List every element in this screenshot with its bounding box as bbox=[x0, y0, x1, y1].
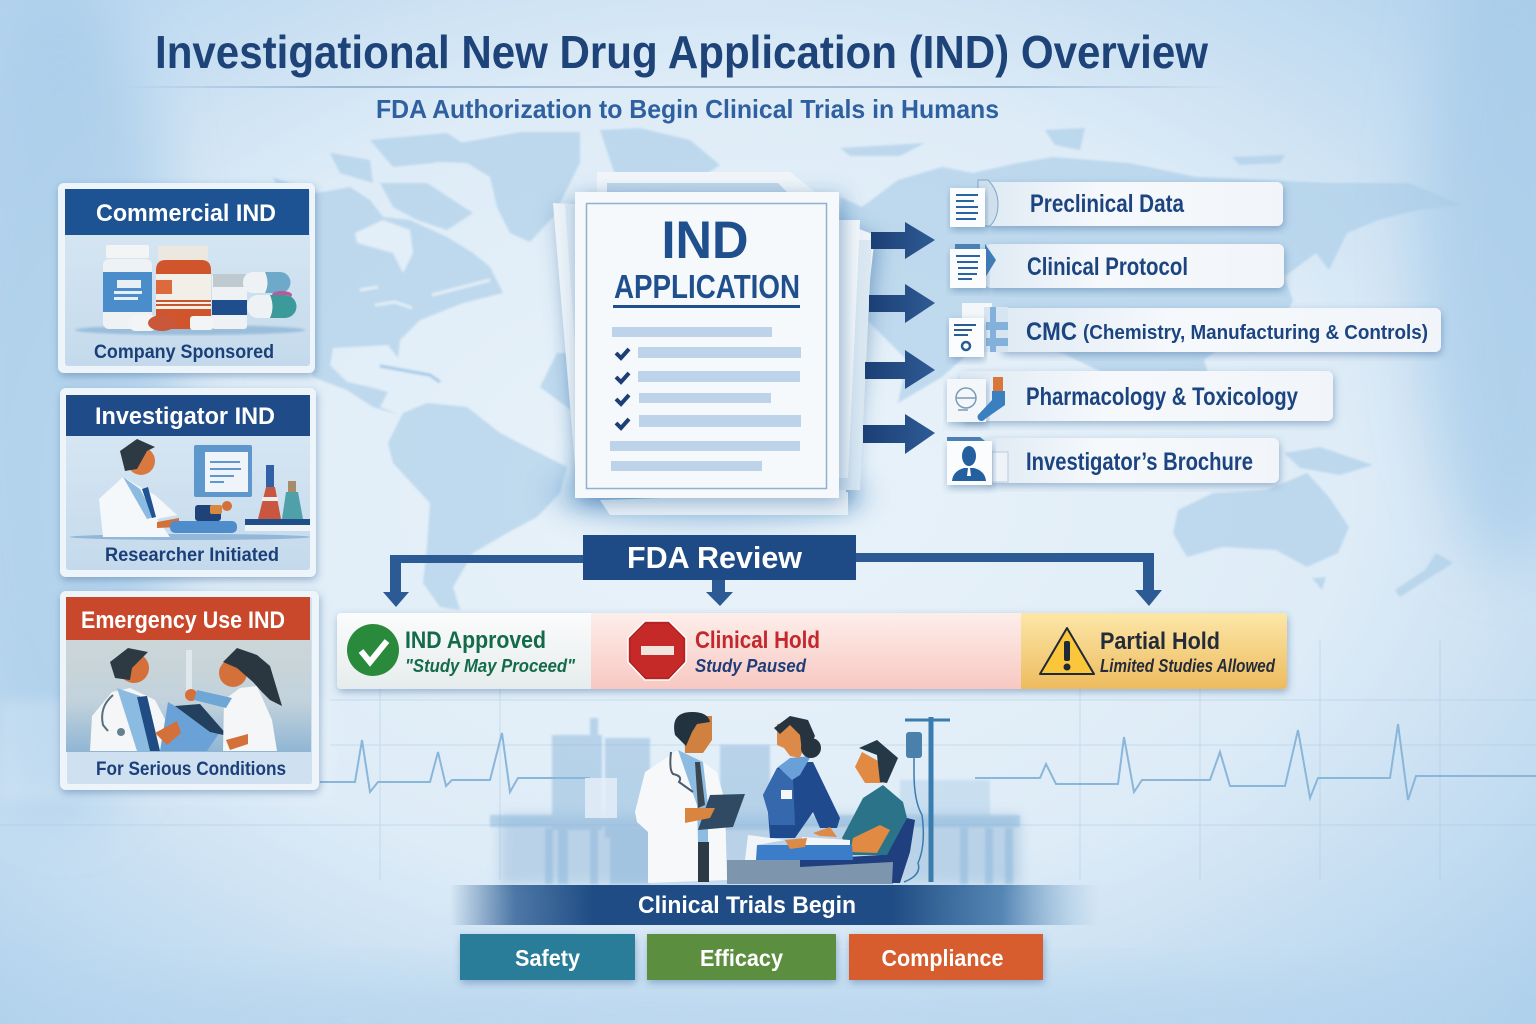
tag: Efficacy: Efficacy bbox=[700, 945, 783, 971]
component: CMC: (Chemistry, Manufacturing & Controls) bbox=[1083, 322, 1428, 344]
icon: stop sign bbox=[628, 621, 686, 680]
icon: chemistry documents bbox=[949, 303, 1008, 357]
title: Investigational New Drug Application (IND) Overview bbox=[155, 26, 1208, 78]
tag: Compliance bbox=[849, 934, 1043, 980]
icon: green check bbox=[347, 624, 399, 676]
banner: Clinical Trials Begin: Clinical Trials Begin bbox=[638, 892, 856, 919]
heading: FDA Review bbox=[583, 535, 856, 580]
illustration: two clinicians consulting bbox=[66, 640, 311, 752]
tag: Efficacy bbox=[647, 934, 836, 980]
heading: FDA Review: FDA Review bbox=[627, 540, 803, 575]
tag: Safety bbox=[460, 934, 635, 980]
heading: Investigator IND: Investigator IND bbox=[95, 403, 275, 430]
caption: For Serious Conditions: For Serious Conditions bbox=[96, 759, 286, 780]
heading: Commercial IND: Commercial IND bbox=[96, 200, 276, 227]
checkmarks bbox=[616, 349, 629, 428]
outcome: IND Approved: "Study May Proceed" bbox=[405, 656, 575, 676]
component: Preclinical Data: Preclinical Data bbox=[1030, 190, 1185, 218]
outcome: Partial Hold bbox=[1021, 613, 1287, 689]
component: Pharmacology & Toxicology: Pharmacology & Toxicology bbox=[1026, 383, 1298, 411]
banner: Clinical Trials Begin bbox=[450, 885, 1100, 925]
panel: Commercial IND bbox=[58, 183, 315, 373]
outcome: Partial Hold: Partial Hold bbox=[1100, 628, 1220, 655]
icon: medicine bottles bbox=[75, 245, 305, 335]
component: Pharmacology & Toxicology bbox=[947, 371, 1333, 422]
heading: Emergency Use IND bbox=[66, 597, 310, 640]
panel: Investigator IND bbox=[60, 388, 316, 577]
world map bbox=[273, 128, 1462, 610]
arrows: document to components bbox=[863, 222, 935, 454]
heading: IND: IND bbox=[662, 211, 748, 270]
component: Investigator's Brochure: Investigator’s Brochure bbox=[1026, 448, 1253, 476]
doctor bbox=[635, 712, 745, 883]
icon: data document bbox=[950, 180, 998, 227]
blanket and papers bbox=[745, 827, 853, 860]
outcome: Clinical Hold bbox=[591, 613, 1021, 689]
outcome: IND Approved bbox=[337, 613, 591, 689]
component: CMC bbox=[949, 303, 1441, 357]
heading: Commercial IND bbox=[65, 189, 309, 235]
outcome: Clinical Hold: Study Paused bbox=[695, 656, 807, 676]
IND application document bbox=[550, 172, 875, 523]
component: Clinical Protocol: Clinical Protocol bbox=[1027, 253, 1188, 281]
illustration: clinical trial scene bbox=[635, 712, 950, 884]
nurse bbox=[763, 716, 840, 838]
icon: protocol document bbox=[950, 244, 996, 288]
ECG and grid backdrop bbox=[0, 640, 1536, 880]
tag: Compliance: Compliance bbox=[882, 945, 1004, 971]
component: Preclinical Data bbox=[950, 180, 1283, 227]
lakes bbox=[355, 220, 413, 273]
document lines bbox=[610, 327, 801, 471]
caption: Researcher Initiated: Researcher Initiated bbox=[105, 545, 279, 566]
icon: warning triangle bbox=[1040, 628, 1094, 674]
IV pole bbox=[904, 717, 950, 882]
caption: Company Sponsored: Company Sponsored bbox=[94, 342, 274, 363]
connector arrows: FDA Review to outcomes bbox=[383, 553, 1162, 607]
heading: Investigator IND bbox=[66, 395, 310, 436]
subtitle: FDA Authorization to Begin Clinical Trials in Humans bbox=[376, 94, 999, 124]
illustration: researcher at desk bbox=[70, 439, 310, 540]
hospital skyline bbox=[490, 718, 1020, 885]
component: Clinical Protocol bbox=[950, 244, 1284, 288]
table bbox=[727, 860, 893, 884]
outcome: Partial Hold: Limited Studies Allowed bbox=[1100, 656, 1276, 676]
heading: Emergency Use IND: Emergency Use IND bbox=[81, 607, 285, 634]
outcomes bar bbox=[337, 613, 1287, 689]
heading: APPLICATION: APPLICATION bbox=[614, 268, 800, 305]
icon: inhaler bbox=[947, 377, 1005, 422]
outcome: Clinical Hold: Clinical Hold bbox=[695, 627, 820, 654]
icon: investigator portrait bbox=[947, 437, 1008, 485]
panel: Emergency Use IND bbox=[60, 591, 319, 790]
outcome: IND Approved: IND Approved bbox=[405, 627, 546, 654]
component: CMC: CMC bbox=[1026, 318, 1077, 346]
patient bbox=[800, 740, 915, 883]
component: Investigator's Brochure bbox=[947, 437, 1279, 485]
tag: Safety: Safety bbox=[515, 945, 580, 971]
